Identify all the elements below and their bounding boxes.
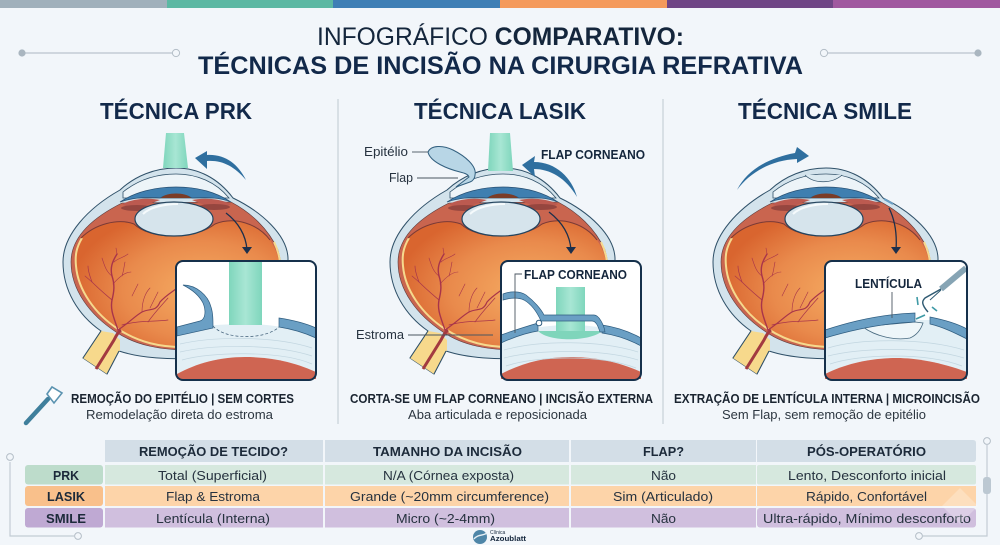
caption: LASIK: CORTA-SE UM FLAP CORNEANO | INCISÃO EXTERNA — [350, 391, 654, 406]
row: LASIK: LASIK — [47, 489, 86, 504]
title connector left — [18, 49, 180, 57]
cornea band — [501, 323, 641, 346]
table header: REMOÇÃO DE TECIDO? — [139, 444, 288, 459]
logo: Azoublatt — [490, 534, 527, 543]
flap lifted — [428, 146, 475, 187]
caption: SMILE: Sem Flap, sem remoção de epitélio — [722, 407, 926, 422]
title connector right — [820, 49, 982, 57]
cornea band — [825, 313, 967, 339]
watermark diamond — [942, 488, 978, 524]
logo — [473, 530, 527, 544]
top colour bar — [0, 0, 1000, 8]
label: Epitélio — [364, 144, 428, 159]
row: SMILE: Ultra-rápido, Mínimo desconforto — [763, 511, 971, 526]
heading: SMILE: TÉCNICA SMILE — [738, 97, 912, 124]
row: SMILE: Lentícula (Interna) — [156, 511, 270, 526]
lenticule in cornea — [805, 175, 842, 182]
arrow: flap rotation — [522, 156, 577, 197]
ablation zone — [538, 331, 602, 339]
row: LASIK: Sim (Articulado) — [613, 489, 713, 504]
table header: FLAP? — [643, 444, 684, 459]
icon: spatula — [26, 387, 62, 423]
row: LASIK: Rápido, Confortável — [806, 489, 927, 504]
row: PRK: Lento, Desconforto inicial — [788, 468, 946, 483]
row: PRK: Não — [651, 468, 676, 483]
label: Estroma — [356, 327, 493, 342]
caption: LASIK: Aba articulada e reposicionada — [408, 407, 588, 422]
lenticule — [863, 322, 923, 339]
lifted flap — [503, 292, 605, 332]
title: TÉCNICAS DE INCISÃO NA CIRURGIA REFRATIVA — [198, 50, 803, 80]
micro-incision — [884, 199, 893, 204]
row: SMILE: Não — [651, 511, 676, 526]
row: PRK — [25, 465, 976, 484]
row: LASIK: Grande (~20mm circumference) — [350, 489, 549, 504]
caption: SMILE — [674, 391, 980, 422]
panel: PRK — [26, 97, 316, 423]
arrow: to detail — [549, 212, 576, 254]
arrow: to detail — [889, 208, 901, 254]
row: LASIK — [25, 486, 976, 506]
label: flap corneano: FLAP CORNEANO — [541, 147, 645, 162]
table connector right — [916, 438, 991, 539]
panel: SMILE — [674, 97, 980, 422]
table header — [105, 440, 976, 462]
heading: PRK: TÉCNICA PRK — [100, 97, 252, 124]
row: SMILE — [25, 508, 976, 528]
table connector left — [7, 454, 81, 539]
extraction arrows — [916, 297, 937, 319]
right epithelium — [279, 318, 316, 338]
arrow: to detail — [226, 213, 252, 254]
table header: PÓS-OPERATÓRIO — [807, 444, 926, 459]
row: LASIK: Flap & Estroma — [166, 489, 261, 504]
label: Lentícula — [855, 276, 923, 318]
eye diagram: LASIK — [390, 168, 617, 374]
caption: PRK: REMOÇÃO DO EPITÉLIO | SEM CORTES — [71, 391, 294, 406]
caption: PRK: Remodelação direta do estroma — [86, 407, 274, 422]
row: PRK: PRK — [53, 468, 80, 483]
caption: LASIK — [350, 391, 654, 422]
label: Flap: Flap — [389, 170, 413, 185]
comparison table — [25, 440, 976, 528]
inset: SMILE lenticule detail — [825, 261, 967, 380]
eye diagram: PRK — [63, 168, 290, 374]
row: PRK: Total (Superficial) — [158, 468, 267, 483]
beam in inset — [556, 287, 585, 333]
label: Epitélio: Epitélio — [364, 144, 408, 159]
laser beam — [163, 133, 188, 168]
inset: LASIK flap detail — [501, 261, 641, 380]
arrow: rotation — [195, 151, 246, 180]
label: Flap — [389, 170, 458, 185]
beam in inset — [229, 262, 262, 325]
inset label: FLAP CORNEANO — [524, 267, 627, 282]
panel: LASIK — [350, 97, 654, 422]
eye diagram: SMILE — [713, 168, 940, 374]
arrow: rotation — [737, 147, 809, 190]
heading: LASIK: TÉCNICA LASIK — [414, 97, 586, 124]
row: SMILE: Micro (~2-4mm) — [396, 511, 495, 526]
forceps — [923, 268, 966, 312]
title — [198, 22, 803, 80]
title: INFOGRÁFICO COMPARATIVO: — [317, 22, 684, 51]
ablation outline — [213, 326, 279, 337]
inset: PRK cornea detail — [176, 261, 316, 380]
laser beam — [488, 133, 513, 171]
peeled epithelium — [177, 285, 213, 336]
logo: Clínica — [490, 530, 506, 536]
label: Lentícula: LENTÍCULA — [855, 276, 923, 291]
row: PRK: N/A (Córnea exposta) — [383, 468, 514, 483]
table header: TAMANHO DA INCISÃO — [373, 444, 522, 459]
hinge — [536, 320, 542, 326]
label: Estroma: Estroma — [356, 327, 405, 342]
row: SMILE: SMILE — [46, 511, 86, 526]
caption: PRK — [71, 391, 294, 422]
